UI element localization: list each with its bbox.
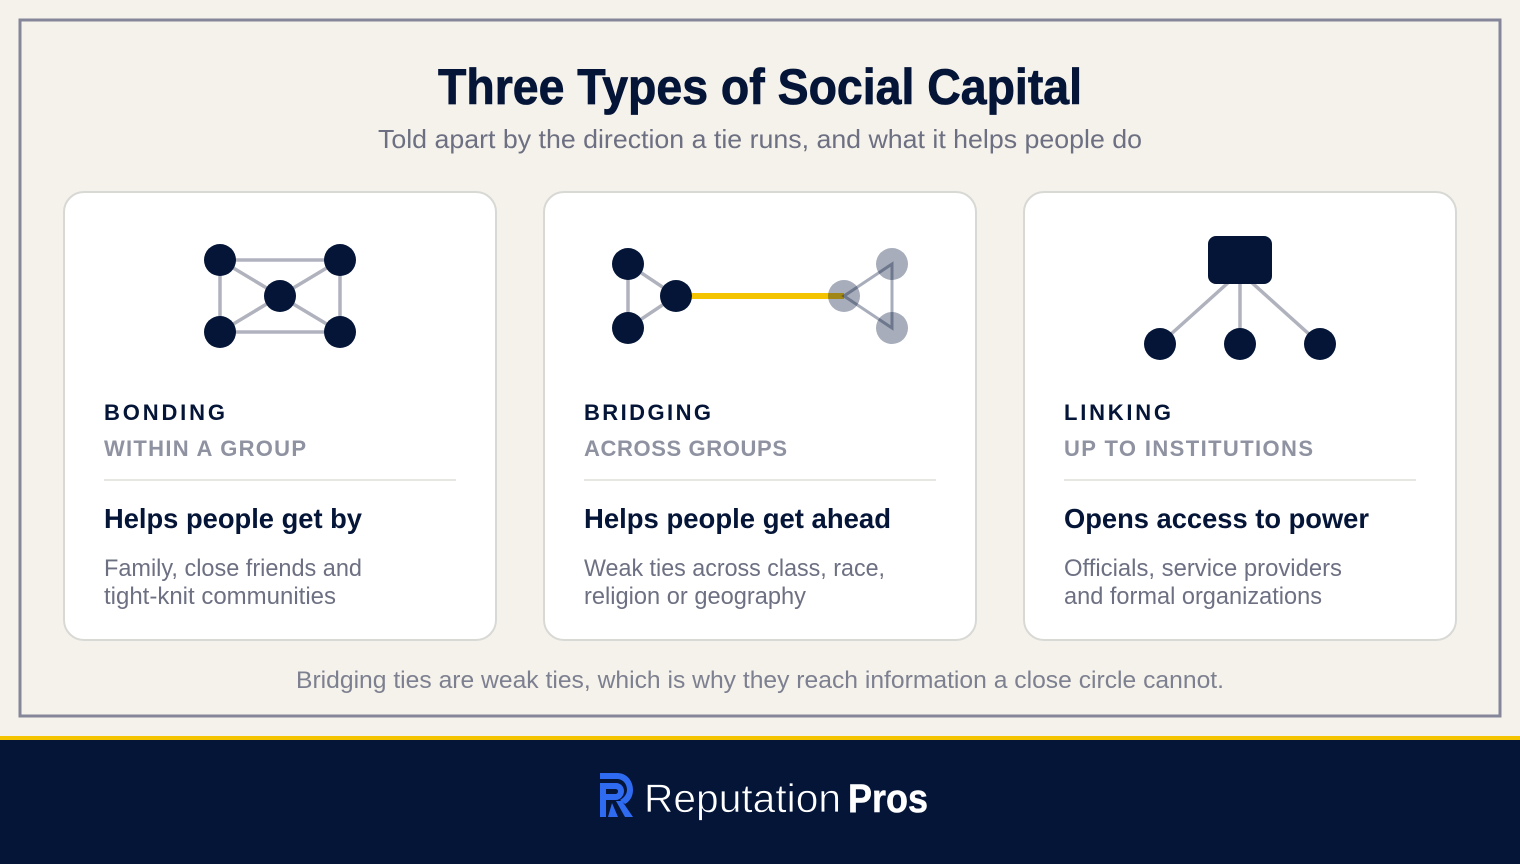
description: bonding: Family, close friends and — [104, 555, 362, 582]
heading: bridging: BRIDGING — [584, 400, 711, 425]
footer band — [0, 736, 1520, 864]
benefit: helps people get by: Helps people get by — [104, 503, 362, 534]
description: bonding: tight-knit communities — [104, 583, 336, 610]
icon: bridging network — [612, 248, 908, 344]
panel: linking — [1024, 192, 1456, 640]
subheading: up to institutions: UP TO INSTITUTIONS — [1064, 436, 1313, 461]
heading: linking: LINKING — [1064, 400, 1171, 425]
subtitle: Told apart by the direction a tie runs, and what it helps people do — [378, 124, 1142, 154]
description: bridging: Weak ties across class, race, — [584, 555, 885, 582]
description: linking: Officials, service providers — [1064, 555, 1342, 582]
description: linking — [1064, 555, 1342, 610]
subheading: within a group: WITHIN A GROUP — [104, 436, 306, 461]
description: bridging: religion or geography — [584, 583, 806, 610]
icon: Reputation Pros logo mark — [600, 773, 633, 817]
description: bonding — [104, 555, 362, 610]
heading: bonding: BONDING — [104, 400, 225, 425]
panel: bridging — [544, 192, 976, 640]
footnote: Bridging ties are weak ties, which is why they reach information a close circle cannot. — [296, 667, 1224, 694]
benefit: opens access to power: Opens access to power — [1064, 503, 1369, 534]
description: bridging — [584, 555, 885, 610]
title: Three Types of Social Capital — [438, 59, 1082, 115]
logo wordmark — [644, 777, 928, 821]
logo wordmark: Pros — [848, 777, 928, 821]
logo wordmark: Reputation — [644, 777, 841, 821]
icon: linking hierarchy — [1144, 236, 1336, 360]
benefit: helps people get ahead: Helps people get ahead — [584, 503, 891, 534]
icon: bonding network — [204, 244, 356, 348]
description: linking: and formal organizations — [1064, 583, 1322, 610]
outer frame — [20, 20, 1500, 716]
subheading: across groups: ACROSS GROUPS — [584, 436, 787, 461]
panel: bonding — [64, 192, 496, 640]
